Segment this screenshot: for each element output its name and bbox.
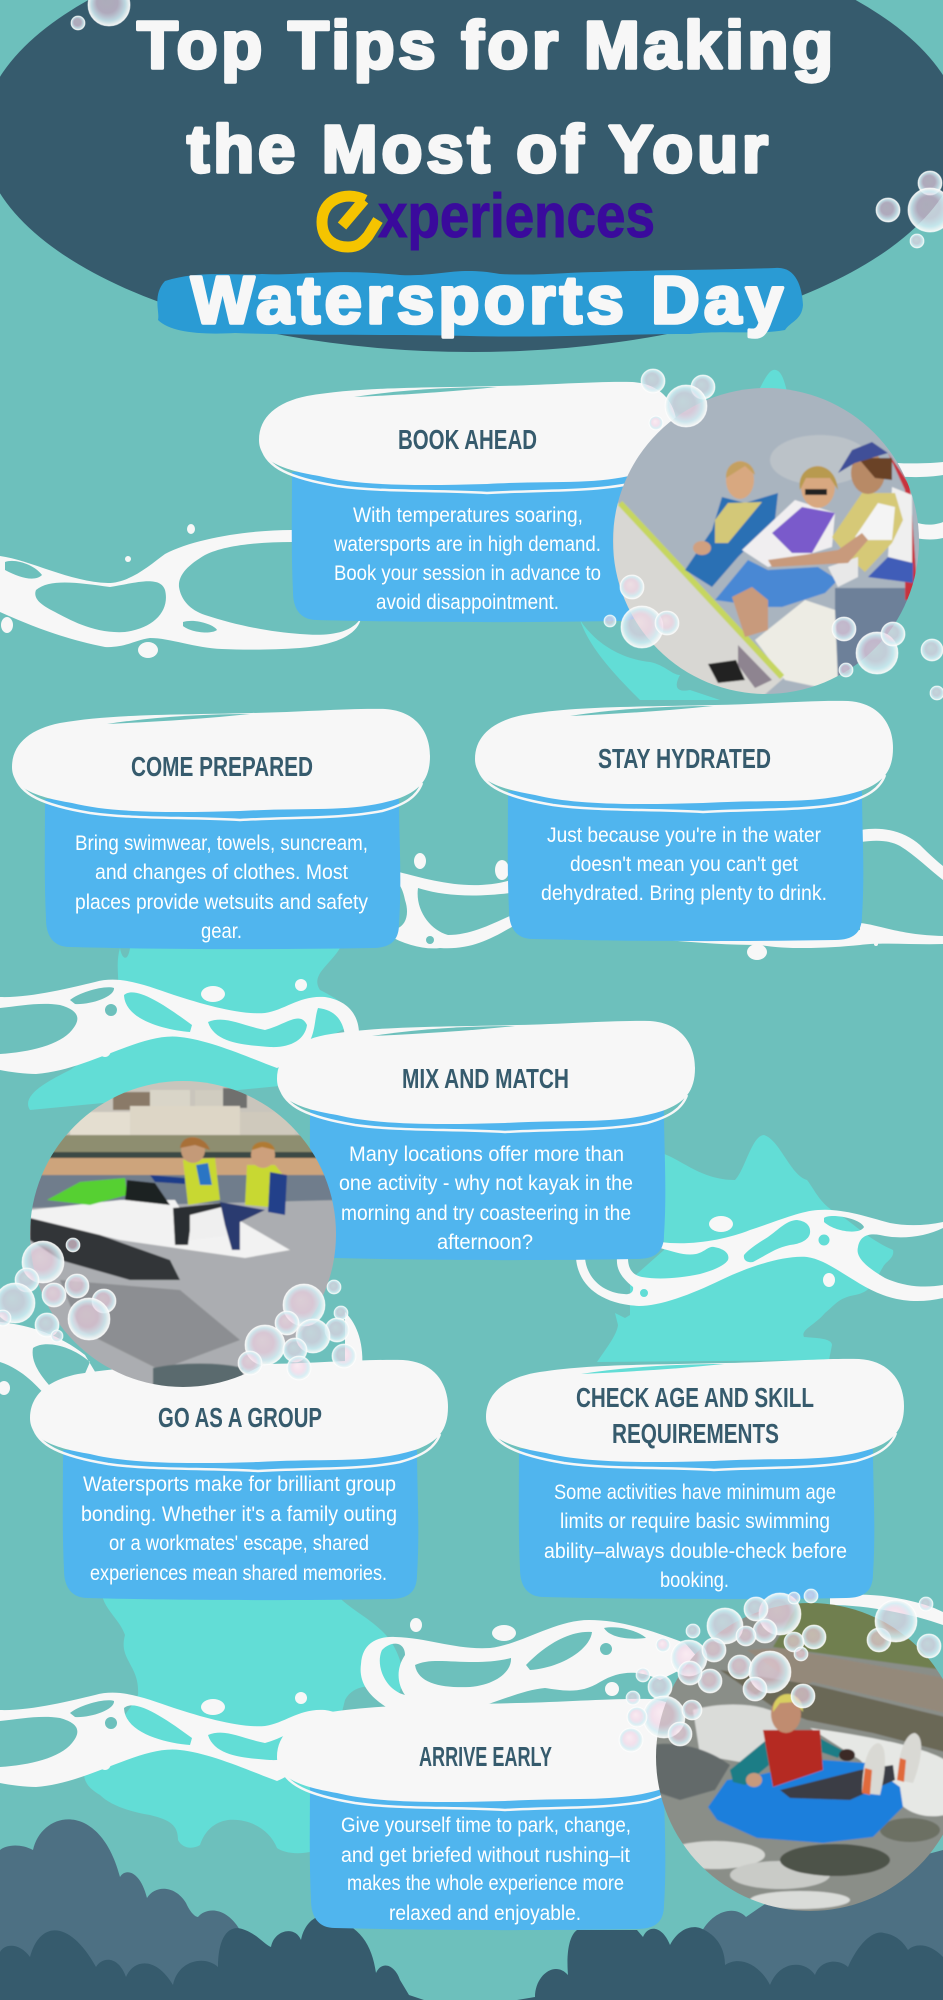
- wave: foam right of mix and match: [576, 1210, 943, 1306]
- title line 2: the Most of Your: [187, 112, 768, 187]
- panel: check age and skill requirements: [486, 1359, 904, 1599]
- photo: river tubing: [650, 1598, 943, 1918]
- clouds: darker layer: [0, 1916, 943, 2000]
- wave: foam above arrive early: [361, 1595, 943, 1712]
- panel body: come prepared: [45, 799, 400, 949]
- photo: jet ski: [25, 1075, 341, 1391]
- text: check age: limits or require basic swimming: [560, 1510, 830, 1533]
- heading: mix and match: MIX AND MATCH: [402, 1063, 569, 1094]
- heading blob: come prepared: [12, 709, 430, 820]
- heading blob: book ahead: [259, 382, 677, 493]
- text: check age: Some activities have minimum age: [554, 1481, 836, 1504]
- text: come prepared: and changes of clothes. Most: [95, 861, 348, 884]
- heading blob: arrive early: [277, 1699, 695, 1810]
- title line 3: Watersports Day: [191, 263, 783, 338]
- splash: middle left: [28, 948, 351, 1110]
- text: check age: [544, 1481, 847, 1592]
- heading: arrive early: ARRIVE EARLY: [419, 1741, 552, 1772]
- text: go as a group: Watersports make for brilliant group: [83, 1473, 396, 1496]
- panel body: mix and match: [310, 1110, 665, 1260]
- heading: check age: REQUIREMENTS: [612, 1418, 779, 1449]
- text: stay hydrated: doesn't mean you can't get: [570, 853, 798, 876]
- panel: mix and match: [277, 1021, 695, 1260]
- heading: go as a group: GO AS A GROUP: [158, 1402, 322, 1433]
- splash: teal cut-out in lower left: [340, 1686, 415, 1720]
- wave: lower left foam: [0, 1692, 359, 1787]
- panel body: stay hydrated: [508, 791, 863, 941]
- text: go as a group: or a workmates' escape, shared: [109, 1532, 369, 1555]
- text: arrive early: [341, 1814, 631, 1925]
- text: go as a group: [81, 1473, 397, 1585]
- header: dark ellipse: [0, 0, 943, 352]
- splash: middle right: [597, 1135, 893, 1362]
- wave: right edge foam beside top photo: [895, 462, 943, 540]
- text: come prepared: Bring swimwear, towels, suncream,: [75, 832, 368, 855]
- splash: lower left: [84, 1595, 403, 1853]
- text: come prepared: [75, 832, 368, 943]
- wave: foam between come prepared and stay hydrated: [388, 853, 515, 948]
- panel body: book ahead: [292, 472, 647, 622]
- panel: go as a group: [30, 1360, 448, 1600]
- bubbles: header top left: [71, 0, 130, 30]
- header: blue brush band: [157, 268, 803, 337]
- panel body: go as a group: [63, 1450, 418, 1600]
- text: stay hydrated: Just because you're in the water: [547, 824, 821, 847]
- text: arrive early: Give yourself time to park, change,: [341, 1814, 631, 1837]
- text: book ahead: [333, 504, 601, 614]
- text: come prepared: places provide wetsuits and safety: [75, 891, 368, 914]
- logo: experiences: xperiences: [378, 182, 655, 251]
- bubbles: book ahead: [604, 369, 943, 700]
- panel body: arrive early: [310, 1780, 665, 1930]
- panel: book ahead: [259, 382, 677, 622]
- wave: foam below jet-ski photo: [0, 1312, 362, 1400]
- text: stay hydrated: dehydrated. Bring plenty to drink.: [541, 882, 827, 905]
- text: stay hydrated: [541, 824, 827, 905]
- text: mix and match: Many locations offer more than: [349, 1143, 624, 1166]
- text: mix and match: [339, 1143, 633, 1254]
- text: come prepared: gear.: [201, 920, 242, 943]
- bubbles: jet ski: [0, 1238, 356, 1380]
- panel: stay hydrated: [475, 701, 893, 941]
- wave: upper left foam: [0, 524, 361, 658]
- text: check age: booking.: [660, 1569, 729, 1592]
- heading blob: check age: [486, 1359, 904, 1470]
- heading blob: stay hydrated: [475, 701, 893, 812]
- text: go as a group: experiences mean shared memories.: [90, 1562, 387, 1585]
- heading: check age: [576, 1382, 814, 1449]
- clouds: lighter layer: [0, 1819, 943, 2000]
- text: book ahead: Book your session in advance to: [334, 562, 601, 585]
- text: arrive early: relaxed and enjoyable.: [389, 1902, 581, 1925]
- heading blob: go as a group: [30, 1360, 448, 1471]
- title line 1: Top Tips for Making: [137, 8, 833, 83]
- photo: sailing crew: [605, 380, 925, 700]
- heading: come prepared: COME PREPARED: [131, 751, 313, 782]
- panel body: check age: [519, 1449, 874, 1599]
- bubbles: tubing top right: [619, 1589, 941, 1752]
- text: mix and match: one activity - why not kayak in the: [339, 1172, 633, 1195]
- wave: foam right of stay hydrated: [667, 829, 943, 960]
- wave: foam above mix and match: [0, 979, 359, 1074]
- heading: stay hydrated: STAY HYDRATED: [598, 743, 771, 774]
- panel: arrive early: [277, 1699, 695, 1930]
- text: book ahead: avoid disappointment.: [376, 591, 559, 614]
- panel: come prepared: [12, 709, 430, 949]
- heading: check age: CHECK AGE AND SKILL: [576, 1382, 814, 1413]
- text: check age: ability–always double-check before: [544, 1540, 847, 1563]
- text: go as a group: bonding. Whether it's a family outing: [81, 1503, 397, 1526]
- text: book ahead: watersports are in high demand.: [333, 533, 601, 556]
- text: mix and match: morning and try coasteering in the: [341, 1202, 631, 1225]
- text: arrive early: makes the whole experience more: [347, 1872, 624, 1895]
- text: book ahead: With temperatures soaring,: [353, 504, 583, 527]
- text: mix and match: afternoon?: [437, 1231, 533, 1254]
- heading blob: mix and match: [277, 1021, 695, 1132]
- splash: behind top photo: [580, 370, 788, 700]
- bubbles: header right: [876, 171, 943, 248]
- text: arrive early: and get briefed without rushing–it: [341, 1844, 630, 1867]
- heading: book ahead: BOOK AHEAD: [398, 424, 537, 455]
